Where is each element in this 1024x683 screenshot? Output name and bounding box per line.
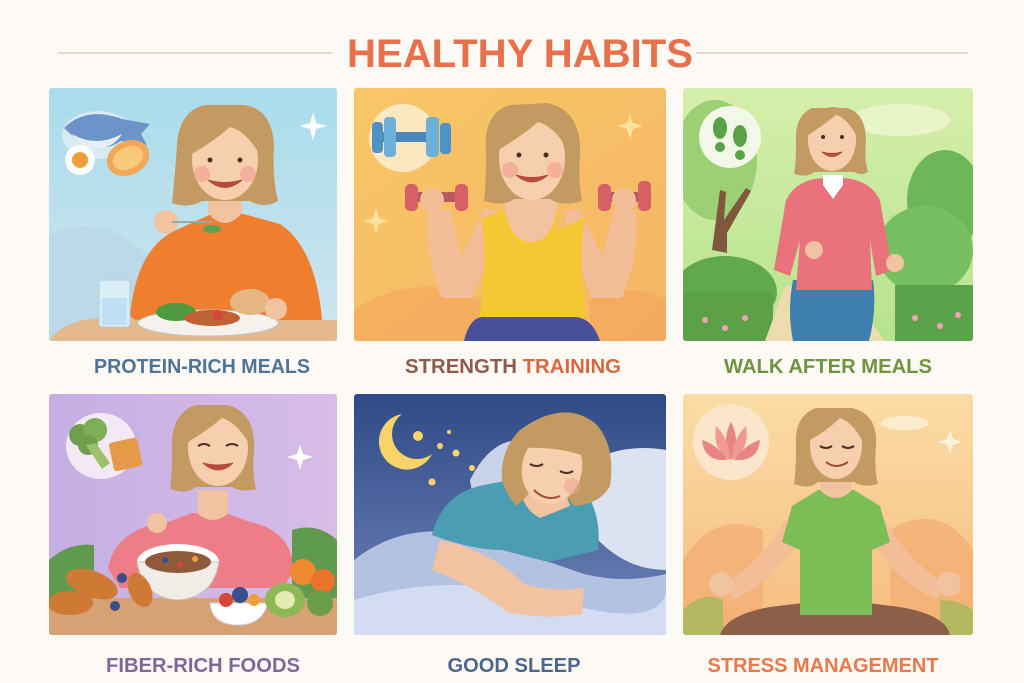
person: woman eating bbox=[130, 105, 322, 324]
sparkles bbox=[617, 113, 643, 139]
table with plate and glass bbox=[49, 280, 337, 341]
bedding bbox=[354, 440, 666, 635]
sparkles bbox=[299, 112, 327, 141]
icon: fish and egg bbox=[62, 111, 150, 176]
icon: right dumbbell bbox=[598, 181, 651, 212]
food spread bbox=[47, 528, 337, 635]
label: fiber-rich foods: FIBER-RICH FOODS bbox=[106, 655, 300, 677]
person: woman with bowl bbox=[108, 405, 294, 588]
label: protein-rich meals: PROTEIN-RICH MEALS bbox=[94, 356, 310, 378]
person: sleeping woman bbox=[432, 412, 611, 617]
label: good sleep: GOOD SLEEP bbox=[448, 655, 580, 677]
panel: stress management bbox=[683, 394, 973, 635]
label: walk after meals: WALK AFTER MEALS bbox=[724, 356, 932, 378]
title: HEALTHY HABITS bbox=[347, 32, 693, 76]
icon: dumbbell bbox=[369, 104, 451, 172]
panel: good sleep bbox=[354, 394, 666, 635]
icon: moon and stars bbox=[379, 414, 475, 486]
person: woman meditating bbox=[709, 408, 961, 635]
label: stress management: STRESS MANAGEMENT bbox=[708, 655, 938, 677]
panel: protein-rich meals bbox=[49, 88, 337, 341]
icon: footprints bbox=[699, 106, 761, 168]
panel: fiber-rich foods bbox=[47, 394, 337, 635]
icon: left dumbbell bbox=[405, 184, 468, 212]
icon: lotus bbox=[693, 404, 769, 480]
label: strength training: STRENGTH TRAINING bbox=[405, 356, 621, 378]
panel: strength training bbox=[354, 88, 666, 341]
icon: broccoli and cracker bbox=[66, 413, 143, 479]
trees and bushes bbox=[673, 100, 983, 341]
person: woman with dumbbells bbox=[405, 103, 651, 341]
sparkles bbox=[938, 430, 962, 454]
person: woman walking bbox=[774, 107, 904, 341]
panel: walk after meals bbox=[673, 88, 983, 341]
